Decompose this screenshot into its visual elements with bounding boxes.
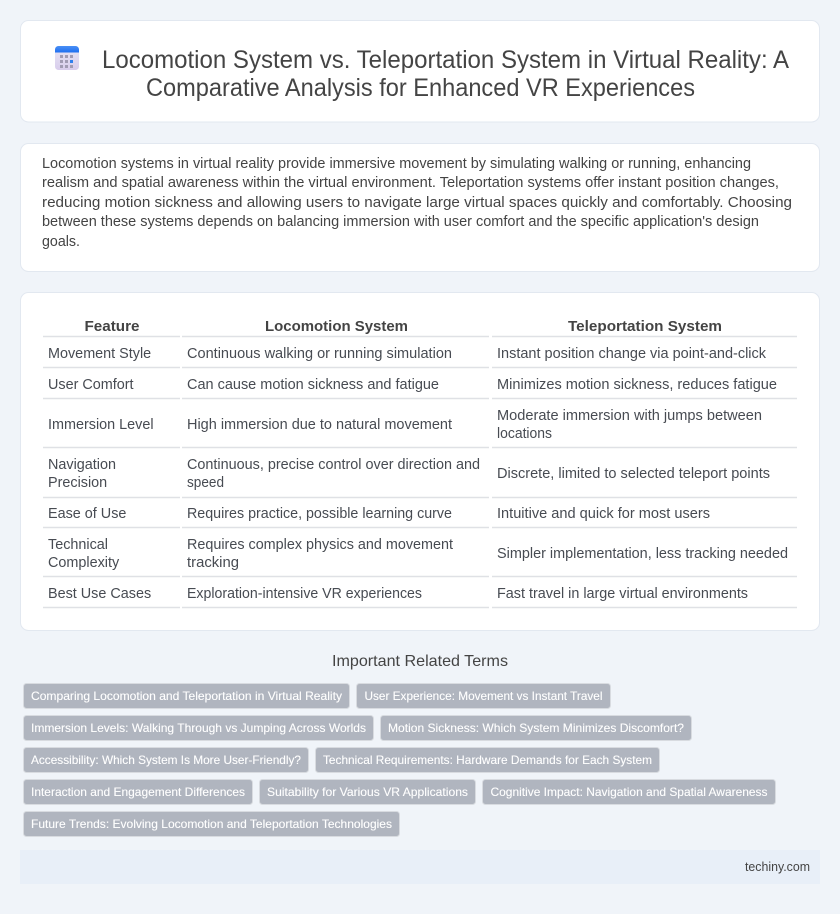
table row: Immersion Level: locations (497, 426, 552, 442)
table row: Immersion Level: High immersion due to natural movement (187, 417, 452, 433)
table row: User Comfort: User Comfort (48, 377, 134, 393)
table row: Best Use Cases: Best Use Cases (48, 586, 151, 602)
table row: Ease of Use (48, 506, 710, 522)
text block: introduction paragraph: goals. (42, 234, 80, 250)
tag (24, 780, 252, 804)
footer (20, 850, 820, 884)
table row: Technical Complexity: Requires complex physics and movement (187, 537, 453, 553)
tag (482, 780, 776, 804)
panel: comparison table (20, 292, 820, 630)
table row: Ease of Use: Ease of Use (48, 506, 126, 522)
table row: Immersion Level: Immersion Level (48, 417, 154, 433)
tag (24, 716, 374, 740)
table row: Movement Style: Instant position change via point-and-click (497, 346, 767, 362)
title: Locomotion System vs. Teleportation System in Virtual Reality: A (102, 46, 789, 74)
table row: Ease of Use: Intuitive and quick for most users (497, 506, 710, 522)
table row: User Comfort: Can cause motion sickness and fatigue (187, 377, 439, 393)
table row: User Comfort: Minimizes motion sickness, reduces fatigue (497, 377, 777, 393)
table row: Movement Style (48, 346, 767, 362)
panel: related term tags (24, 684, 776, 836)
text block: introduction paragraph: between these systems depends on balancing immersion with user comfort and the specific application's design (42, 214, 759, 230)
tag (260, 780, 476, 804)
panel: introduction (20, 144, 820, 272)
table row: Navigation Precision: Precision (48, 475, 107, 491)
table row: Navigation Precision: Continuous, precise control over direction and (187, 457, 480, 473)
table row: User Comfort (48, 377, 777, 393)
table row: Best Use Cases (48, 586, 748, 602)
table row: Immersion Level (48, 408, 762, 442)
tag: Technical Requirements: Hardware Demands for Each System (323, 753, 652, 767)
tag (24, 748, 308, 772)
tag: Motion Sickness: Which System Minimizes Discomfort? (388, 721, 684, 735)
heading: Important Related Terms: Important Related Terms (332, 653, 508, 670)
table header row: Feature (84, 318, 140, 335)
tag: Cognitive Impact: Navigation and Spatial Awareness (490, 785, 768, 799)
tag (380, 716, 692, 740)
tag (24, 684, 350, 708)
table row: Ease of Use: Requires practice, possible learning curve (187, 506, 452, 522)
table header row: Locomotion System (265, 318, 408, 335)
tag: Immersion Levels: Walking Through vs Jumping Across Worlds (31, 721, 366, 735)
table row: Immersion Level: Moderate immersion with jumps between (497, 408, 762, 424)
icon: calendar grid (55, 46, 79, 70)
table row: Technical Complexity: Complexity (48, 555, 120, 571)
panel: title header (20, 20, 820, 122)
tag (356, 684, 610, 708)
tag: Accessibility: Which System Is More User-Friendly? (31, 753, 301, 767)
title (102, 46, 789, 102)
tag: Future Trends: Evolving Locomotion and Teleportation Technologies (31, 817, 392, 831)
table row: Navigation Precision: Discrete, limited to selected teleport points (497, 466, 770, 482)
table row: Movement Style: Movement Style (48, 346, 151, 362)
table row: Movement Style: Continuous walking or running simulation (187, 346, 452, 362)
text block: introduction paragraph (42, 156, 792, 250)
tag (24, 812, 400, 836)
table row: Navigation Precision (48, 457, 770, 491)
table row: Technical Complexity: Technical (48, 537, 108, 553)
table row: Best Use Cases: Fast travel in large virtual environments (497, 586, 748, 602)
tag: Suitability for Various VR Applications (267, 785, 468, 799)
table row: Technical Complexity: tracking (187, 555, 239, 571)
table row: Technical Complexity: Simpler implementation, less tracking needed (497, 546, 788, 562)
title: Comparative Analysis for Enhanced VR Experiences (146, 74, 695, 102)
table header row: Teleportation System (568, 318, 722, 335)
text block: introduction paragraph: realism and spatial awareness within the virtual environment. Teleportation systems offer instant position changes, (42, 175, 779, 191)
footer: techiny.com (745, 859, 810, 874)
text block: introduction paragraph: reducing motion sickness and allowing users to navigate large virtual spaces quickly and comfortably. Choosing (42, 195, 792, 211)
table row: Technical Complexity (48, 537, 788, 571)
text block: introduction paragraph: Locomotion systems in virtual reality provide immersive movement by simulating walking or running, enhancing (42, 156, 751, 172)
table row: Navigation Precision: Navigation (48, 457, 116, 473)
table row: Navigation Precision: speed (187, 475, 224, 491)
tag (316, 748, 660, 772)
tag: Interaction and Engagement Differences (31, 785, 245, 799)
tag: Comparing Locomotion and Teleportation in Virtual Reality (31, 689, 342, 703)
tag: User Experience: Movement vs Instant Travel (364, 689, 602, 703)
table row: Best Use Cases: Exploration-intensive VR experiences (187, 586, 422, 602)
table header row (84, 318, 722, 335)
